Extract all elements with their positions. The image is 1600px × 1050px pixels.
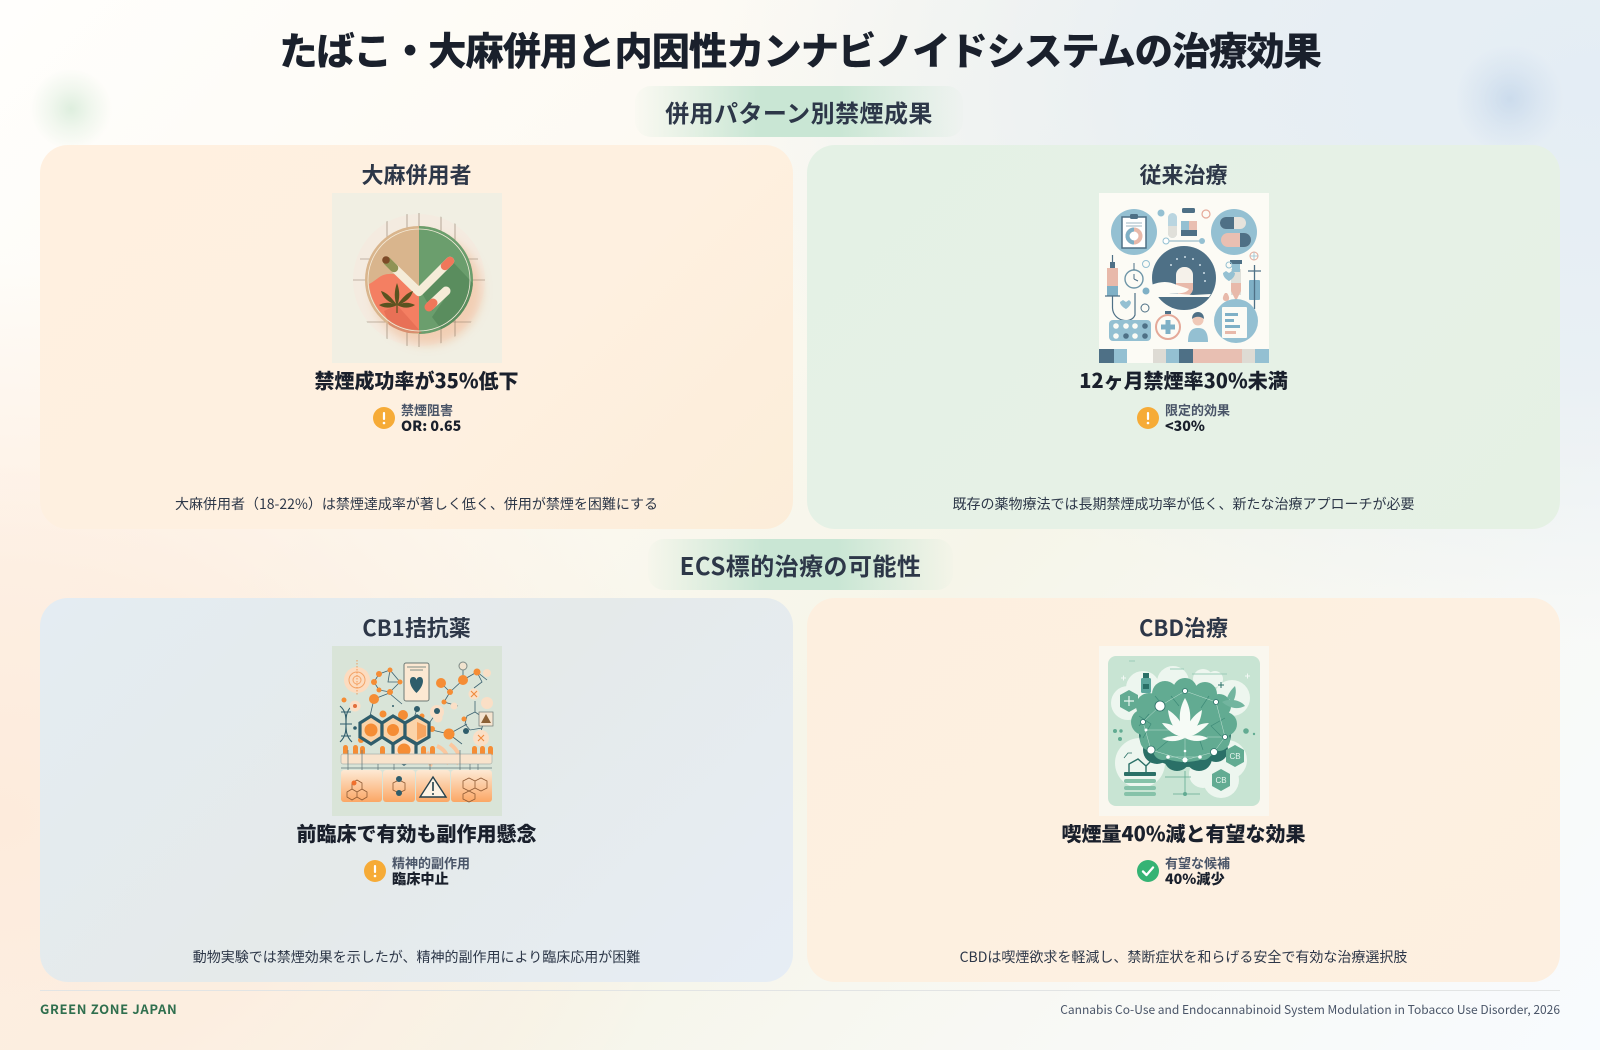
panel heading: CBD治療 (1139, 611, 1228, 643)
panel: CBD treatment (807, 598, 1560, 982)
key finding: 喫煙量40%減と有望な効果 (1061, 818, 1306, 847)
icon: warning (1137, 407, 1159, 429)
illustration: cannabis leaf over brain: CB (1215, 776, 1227, 785)
icon: warning (373, 407, 395, 429)
badge label: 有望な候補 (1165, 853, 1230, 872)
badge: psychiatric side effects (364, 853, 470, 889)
key finding: 前臨床で有効も副作用懸念 (296, 818, 536, 847)
icon: check (1137, 860, 1159, 882)
section heading: co-use outcomes: 併用パターン別禁煙成果 (665, 94, 933, 129)
illustration: clock-style comparison with cigarette check mark (332, 193, 502, 363)
panel heading: 従来治療 (1139, 158, 1228, 190)
badge label: 限定的効果 (1165, 400, 1230, 419)
badge value: OR: 0.65 (401, 416, 461, 436)
illustration: medical icons collage (1099, 193, 1269, 363)
panel description: 動物実験では禁煙効果を示したが、精神的副作用により臨床応用が困難 (193, 947, 640, 967)
panel heading: CB1拮抗薬 (362, 611, 471, 643)
decorative glow: green (30, 68, 112, 150)
badge: promising candidate (1137, 853, 1230, 889)
icon: warning (364, 860, 386, 882)
panel description: 既存の薬物療法では長期禁煙成功率が低く、新たな治療アプローチが必要 (952, 494, 1414, 514)
title: たばこ・大麻併用と内因性カンナビノイドシステムの治療効果 (279, 21, 1321, 77)
section heading: ECS-targeted therapy: ECS標的治療の可能性 (680, 547, 921, 582)
badge value: 40%減少 (1165, 869, 1225, 889)
illustration: cannabis leaf over brain: CB (1229, 752, 1241, 761)
badge value: <30% (1165, 416, 1205, 436)
badge: limited effect (1137, 400, 1230, 436)
key finding: 12ヶ月禁煙率30%未満 (1079, 365, 1288, 394)
panel description: 大麻併用者（18-22%）は禁煙達成率が著しく低く、併用が禁煙を困難にする (175, 494, 658, 514)
section heading: ECS-targeted therapy (648, 539, 953, 590)
key finding: 禁煙成功率が35%低下 (314, 365, 519, 394)
illustration: cannabis leaf over brain (1099, 646, 1269, 816)
panel: CB1 antagonist (40, 598, 793, 982)
badge label: 禁煙阻害 (401, 400, 453, 419)
badge label: 精神的副作用 (392, 853, 470, 872)
panel: conventional treatment (807, 145, 1560, 529)
panel: cannabis co-users (40, 145, 793, 529)
footer brand: GREEN ZONE JAPAN (40, 999, 177, 1018)
section heading: co-use outcomes (635, 86, 963, 137)
panel description: CBDは喫煙欲求を軽減し、禁断症状を和らげる安全で有効な治療選択肢 (960, 947, 1407, 967)
decorative glow: blue (1456, 45, 1564, 153)
badge value: 臨床中止 (392, 869, 449, 889)
badge: odds ratio warning (373, 400, 461, 436)
illustration: molecules and warning panels (332, 646, 502, 816)
footer source: Cannabis Co-Use and Endocannabinoid System Modulation in Tobacco Use Disorder, 2026 (1060, 1001, 1560, 1018)
panel heading: 大麻併用者 (361, 158, 472, 190)
